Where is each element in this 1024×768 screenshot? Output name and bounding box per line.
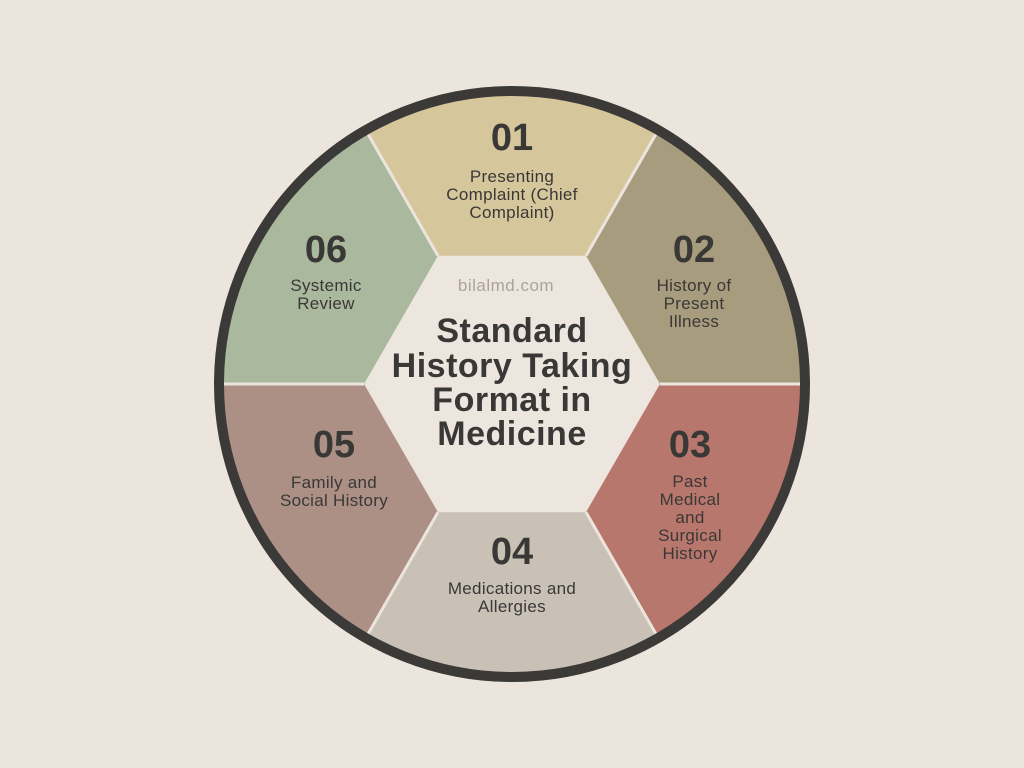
- label 03: Medical: [660, 490, 720, 509]
- title: History Taking: [392, 347, 632, 385]
- panel: 06 systemic review: [222, 133, 512, 384]
- label 01: Presenting: [470, 167, 554, 186]
- number 02: 02: [673, 229, 715, 271]
- title: Format in: [432, 381, 592, 419]
- label 03: History: [662, 544, 718, 563]
- label 02: Present: [664, 294, 724, 313]
- label 01: Complaint (Chief: [446, 185, 578, 204]
- panel: 04 medications and allergies: [367, 384, 657, 674]
- label 05: Family and: [291, 473, 377, 492]
- number 05: 05: [313, 424, 355, 466]
- website credit: bilalmd.com: [458, 276, 554, 295]
- label 03: and: [675, 508, 705, 527]
- label 06: Review: [297, 294, 355, 313]
- panel: 05 family and social history: [222, 384, 512, 635]
- label 04: Medications and: [448, 579, 576, 598]
- panel: 02 history of present illness: [512, 133, 802, 384]
- label 01: Complaint): [469, 203, 555, 222]
- label 03: Past: [672, 472, 708, 491]
- number 03: 03: [669, 424, 711, 466]
- label 05: Social History: [280, 491, 388, 510]
- label 03: Surgical: [658, 526, 722, 545]
- label 02: History of: [657, 276, 731, 295]
- panel: 01 presenting complaint: [367, 94, 657, 384]
- label 04: Allergies: [478, 597, 546, 616]
- number 04: 04: [491, 531, 533, 573]
- title: Standard: [436, 312, 588, 350]
- label 02: Illness: [669, 312, 719, 331]
- title: Medicine: [437, 415, 587, 453]
- number 06: 06: [305, 229, 347, 271]
- label 06: Systemic: [290, 276, 362, 295]
- outer ring: [219, 91, 805, 677]
- panel: 03 past medical and surgical history: [512, 384, 802, 635]
- center hexagon: [364, 256, 660, 512]
- number 01: 01: [491, 117, 533, 159]
